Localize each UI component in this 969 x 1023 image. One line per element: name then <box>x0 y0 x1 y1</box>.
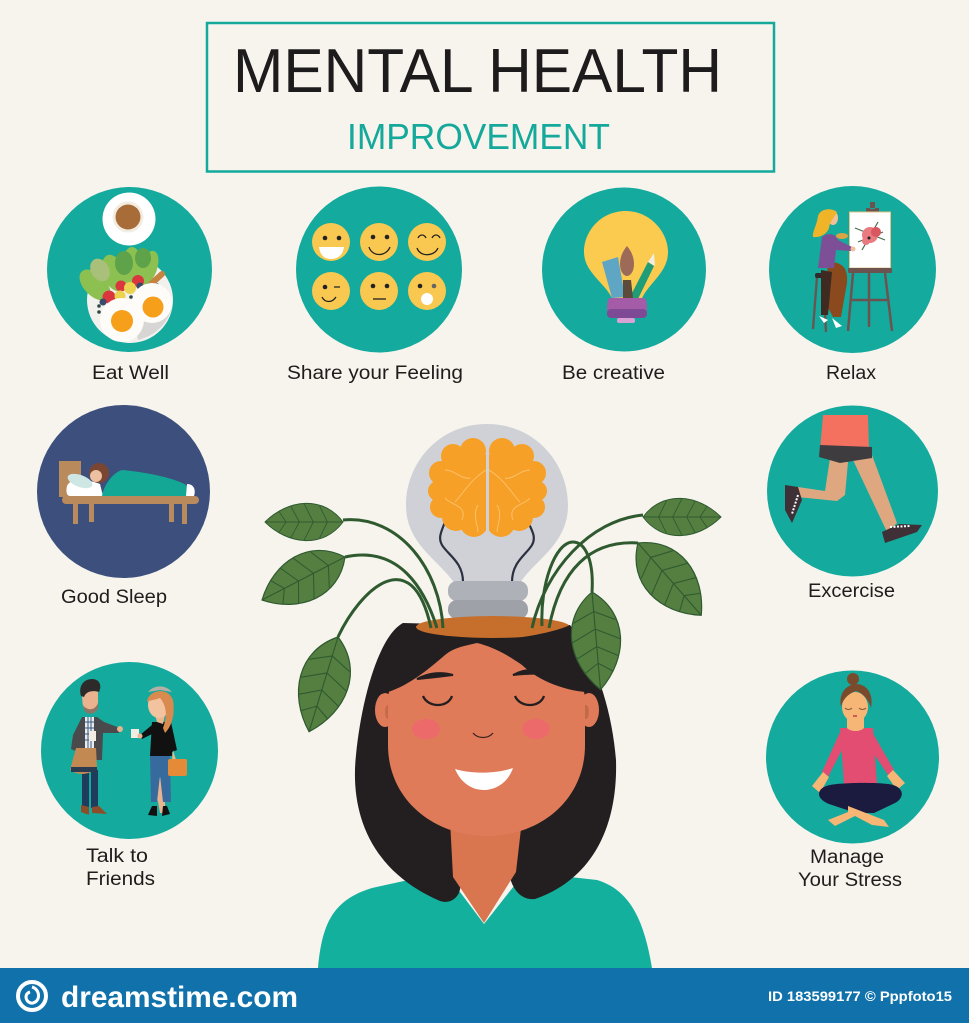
icon: neutral emoji <box>360 272 398 310</box>
panel: be creative <box>542 188 706 352</box>
panel: excercise <box>767 406 938 576</box>
label: talk to friends <box>86 846 155 890</box>
panel: eat well <box>47 187 212 352</box>
leaf: lower right <box>568 590 625 692</box>
icon: happy closed-eyes emoji <box>408 223 446 261</box>
leaf: lower left <box>286 630 361 739</box>
cheeks <box>412 719 550 739</box>
icon: coffee cup <box>102 192 156 246</box>
icon: man with coffee <box>70 679 123 815</box>
label: share your feeling: Share your Feeling <box>287 363 463 384</box>
panel: manage your stress <box>766 670 939 844</box>
icon: meditating woman <box>812 673 905 827</box>
icon: creative bulb <box>584 211 668 323</box>
open head <box>416 616 570 638</box>
label: talk to friends: Friends <box>86 869 155 890</box>
fringe <box>378 623 590 695</box>
icon: sleeping person in bed <box>59 461 199 524</box>
icon: running legs <box>785 415 922 543</box>
label: manage your stress <box>798 847 902 891</box>
icon: smiling emoji <box>360 223 398 261</box>
label: manage your stress: Your Stress <box>798 870 902 891</box>
leaf: middle left <box>251 536 356 621</box>
panel: relax <box>769 186 936 353</box>
image credit: ID 183599177 © Pppfoto15 <box>768 988 952 1004</box>
icon: painter <box>813 209 856 332</box>
label: relax: Relax <box>826 363 877 384</box>
panel: talk to friends <box>41 662 218 839</box>
subheading: improvement: IMPROVEMENT <box>347 116 610 157</box>
hair back <box>355 623 616 902</box>
heading: mental health: MENTAL HEALTH <box>233 37 722 106</box>
icon: grinning emoji <box>312 223 350 261</box>
closed eyes <box>423 696 544 705</box>
label: eat well: Eat Well <box>92 363 169 384</box>
ears <box>375 693 599 727</box>
nose <box>473 733 493 738</box>
logo spiral <box>18 982 46 1010</box>
label: talk to friends: Talk to <box>86 846 148 867</box>
panel: good sleep <box>37 405 210 578</box>
lightbulb with brain <box>406 424 568 630</box>
central illustration: woman with bulb and plants <box>251 424 721 968</box>
leaf: upper right <box>643 498 721 536</box>
smile <box>455 768 513 790</box>
logo text: dreamstime.com <box>61 981 298 1014</box>
footer bar <box>0 968 969 1023</box>
label: excercise: Excercise <box>808 581 895 602</box>
face <box>388 642 585 836</box>
icon: breakfast plate <box>74 247 173 343</box>
leaf: middle right <box>620 527 720 631</box>
body <box>318 872 652 968</box>
icon: woman with coffee <box>131 686 187 816</box>
label: be creative: Be creative <box>562 363 665 384</box>
label: good sleep: Good Sleep <box>61 587 167 608</box>
icon: easel and canvas <box>848 202 892 331</box>
panel: share your feeling <box>296 186 462 352</box>
title box <box>207 23 774 172</box>
label: manage your stress: Manage <box>810 847 884 868</box>
neck <box>450 820 522 923</box>
icon: winking emoji <box>312 272 350 310</box>
icon: surprised emoji <box>408 272 446 310</box>
leaf: upper left <box>265 503 343 541</box>
eyebrows <box>417 670 542 679</box>
stems <box>338 515 643 637</box>
